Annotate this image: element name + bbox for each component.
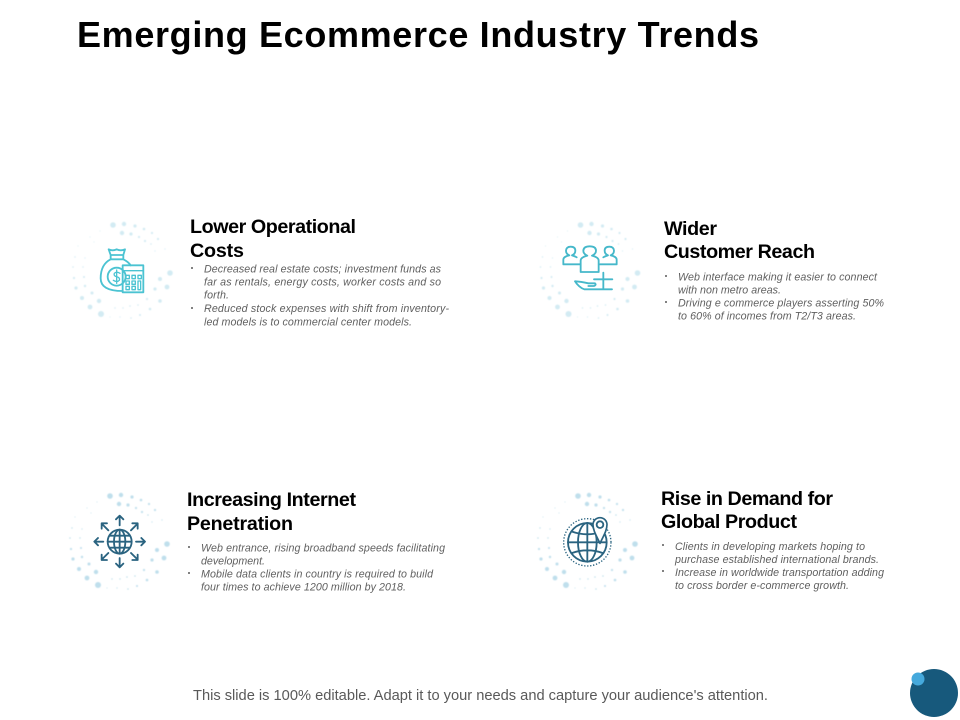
bullet list [662, 541, 884, 592]
panel: wider customer reach [540, 218, 885, 322]
bullet list: development. [201, 556, 265, 568]
heading: Global Product [661, 511, 797, 533]
bullet list [665, 272, 885, 322]
heading: Increasing Internet [187, 489, 356, 511]
bullet list: four times to achieve 1200 million by 2018. [201, 582, 406, 594]
heading [664, 218, 815, 263]
icon: globe with location pin [564, 518, 611, 566]
heading: Wider [664, 218, 717, 240]
bullet list: forth. [204, 290, 229, 302]
panel: lower operational costs [72, 216, 449, 328]
panel: increasing internet penetration [69, 489, 445, 594]
bullet list: to cross border e-commerce growth. [675, 580, 849, 592]
bullet list: far as rentals, energy costs, worker costs and so [204, 276, 441, 288]
panel: rise in demand for global product [537, 488, 884, 592]
bullet list: purchase established international brands. [674, 554, 879, 566]
bullet list: Decreased real estate costs; investment funds as [204, 264, 442, 276]
bullet list: led models is to commercial center models. [204, 316, 412, 328]
dotted ring [69, 493, 170, 590]
bullet list: Clients in developing markets hoping to [675, 541, 865, 553]
heading: Rise in Demand for [661, 488, 833, 510]
heading: Customer Reach [664, 241, 815, 263]
icon: globe with arrows [94, 516, 145, 567]
heading [187, 489, 356, 535]
bullet list: Reduced stock expenses with shift from inventory- [204, 303, 449, 315]
dotted ring [72, 222, 173, 319]
bullet list [191, 264, 449, 328]
icon: customers on a hand [563, 246, 617, 289]
heading [190, 216, 356, 262]
icon: money bag and calculator [101, 249, 143, 292]
heading: Penetration [187, 513, 293, 535]
bullet list: Web entrance, rising broadband speeds facilitating [201, 542, 445, 554]
bullet list: Increase in worldwide transportation adding [675, 567, 884, 579]
footer note: This slide is 100% editable. Adapt it to your needs and capture your audience's attention. [193, 688, 768, 704]
dotted ring [540, 222, 640, 319]
bullet list: Driving e commerce players asserting 50% [678, 298, 885, 310]
bullet list: Web interface making it easier to connect [678, 272, 878, 284]
heading: Lower Operational [190, 216, 356, 238]
bullet list: to 60% of incomes from T2/T3 areas. [678, 310, 856, 322]
bullet list: with non metro areas. [678, 284, 781, 296]
corner badge [910, 669, 958, 717]
heading [661, 488, 833, 533]
bullet list [188, 542, 445, 594]
dotted ring [537, 493, 638, 590]
title: Emerging Ecommerce Industry Trends [77, 14, 759, 55]
heading: Costs [190, 240, 244, 262]
bullet list: Mobile data clients in country is required to build [201, 568, 434, 580]
